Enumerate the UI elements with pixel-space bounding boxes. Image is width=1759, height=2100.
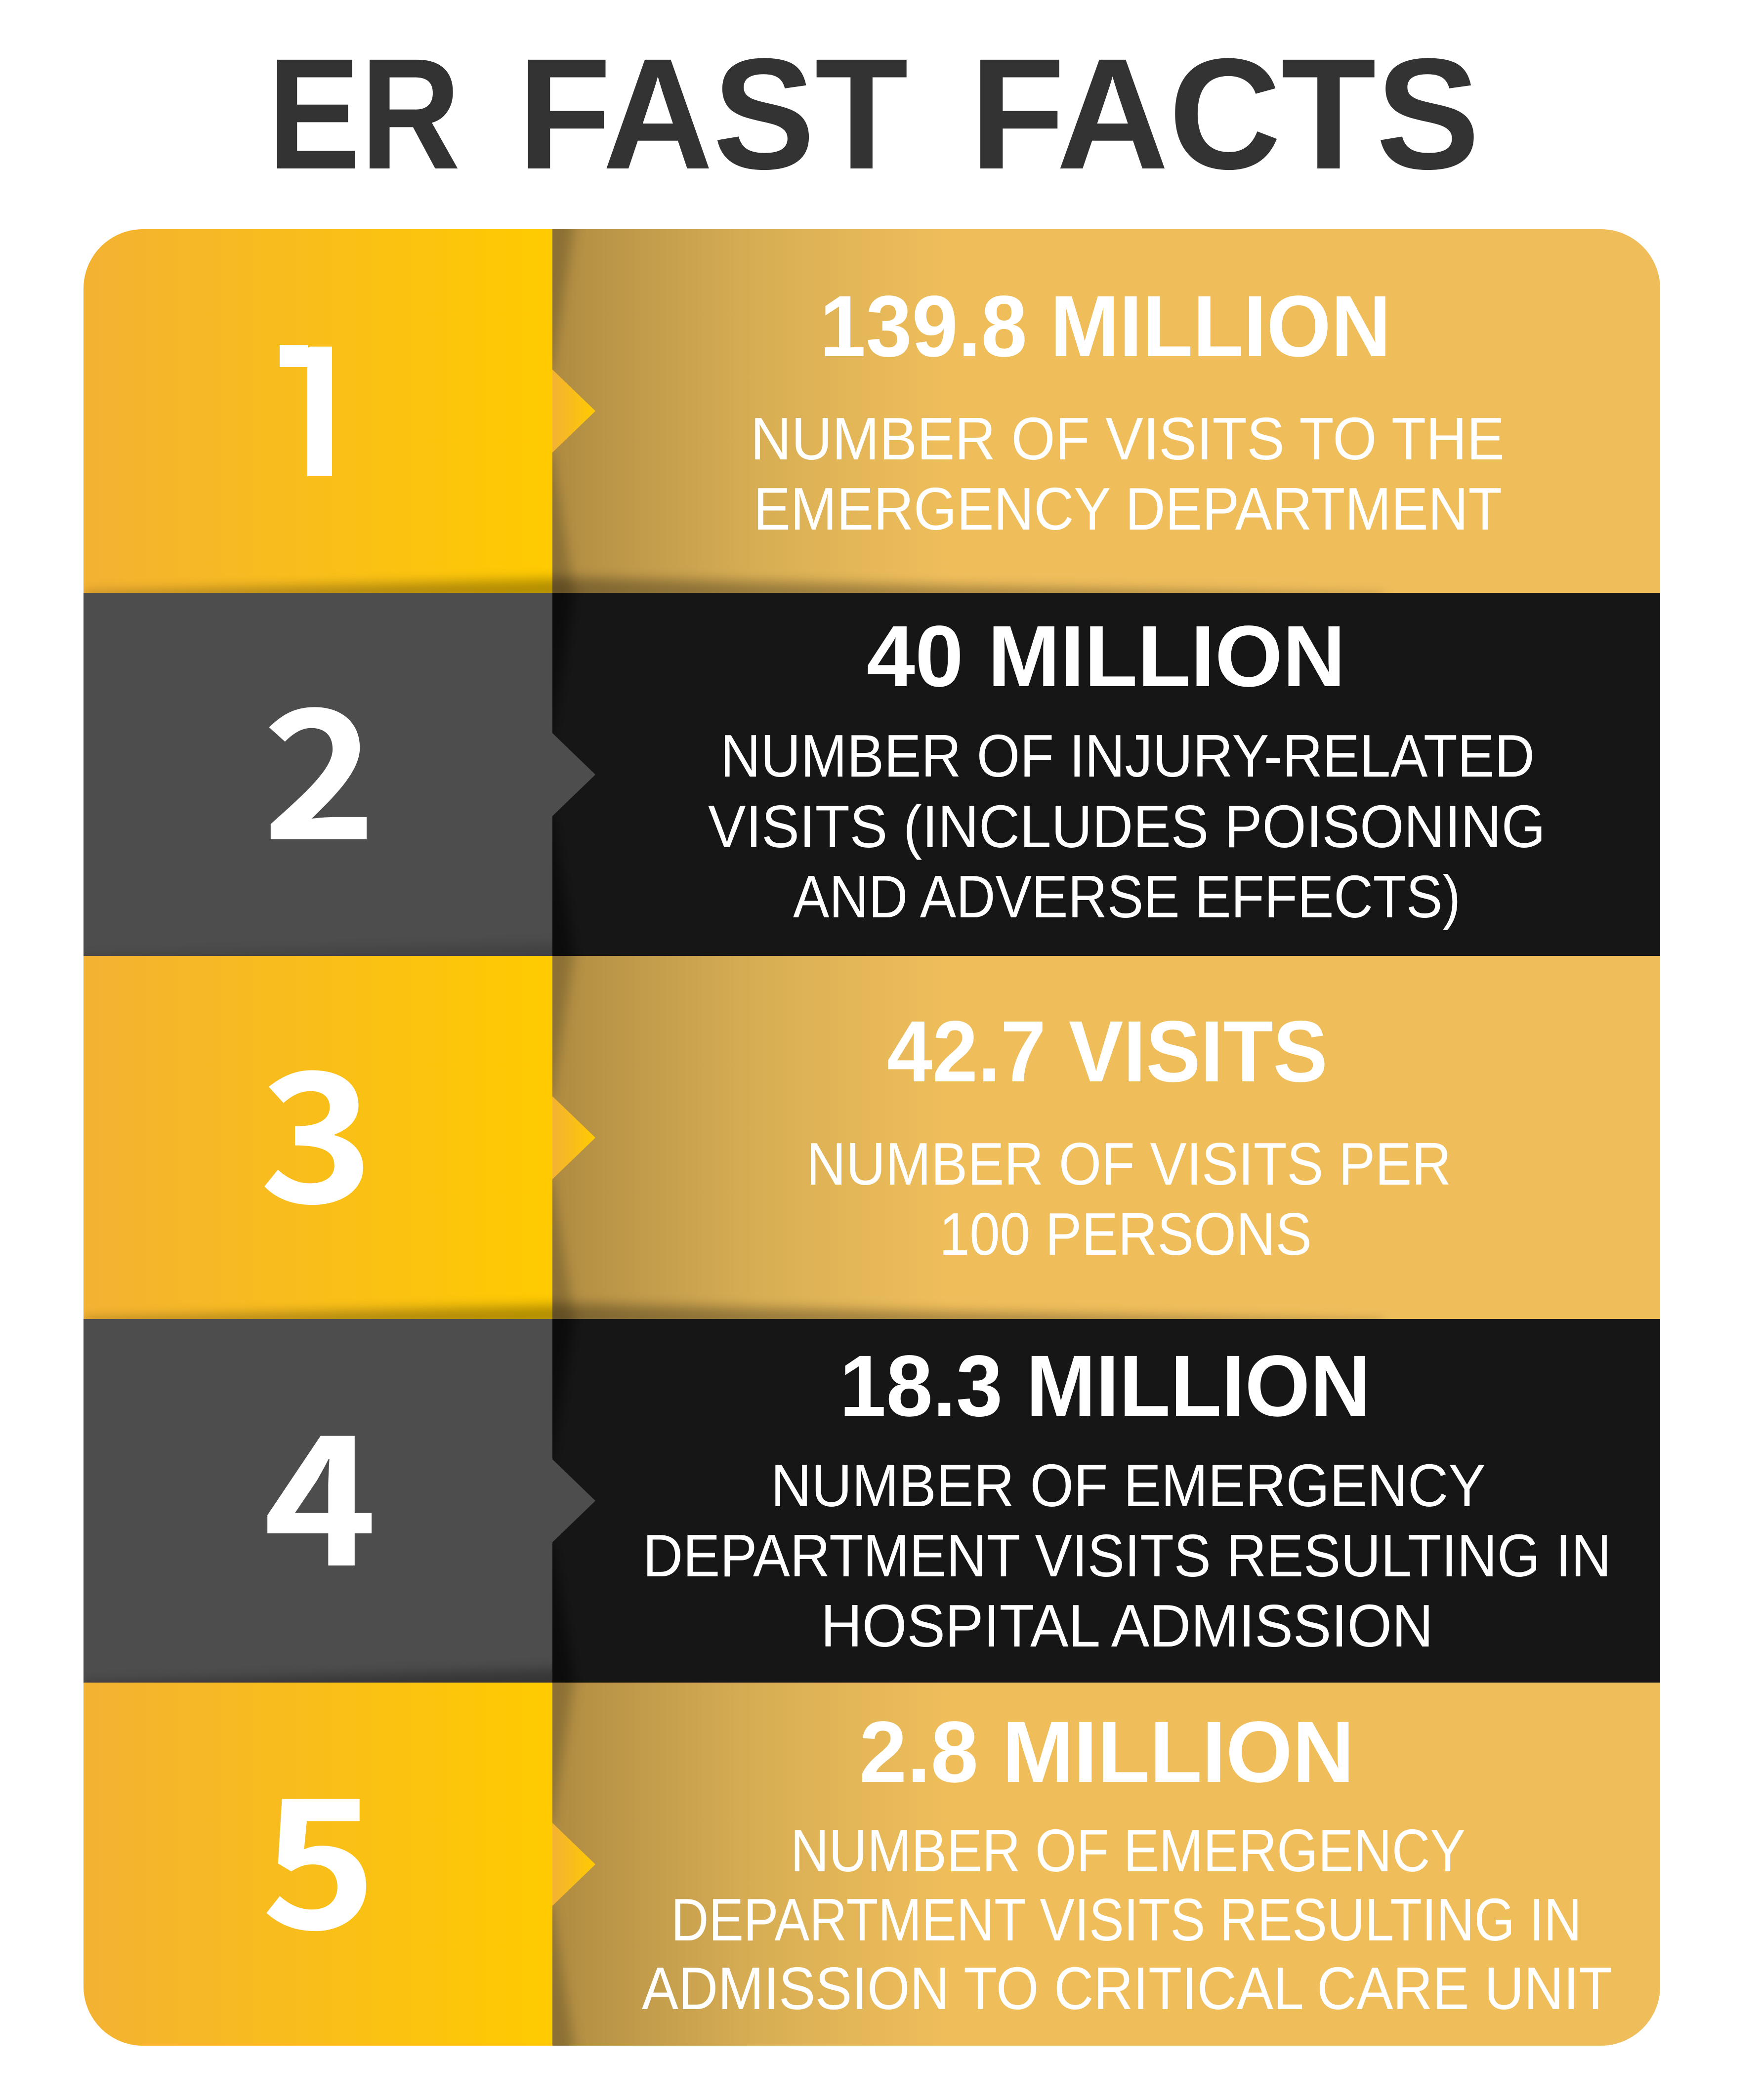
description 4 <box>643 1452 1611 1659</box>
panel: fact 1 <box>84 217 1660 603</box>
description 5: DEPARTMENT VISITS RESULTING IN <box>671 1886 1582 1953</box>
description 3: 100 PERSONS <box>939 1200 1312 1268</box>
description 2 <box>708 722 1546 930</box>
number 1: 1 <box>250 268 378 528</box>
title: FAST <box>518 25 908 202</box>
description 1: EMERGENCY DEPARTMENT <box>754 475 1502 542</box>
title: FACTS <box>970 25 1480 202</box>
description 2: AND ADVERSE EFFECTS) <box>793 863 1461 930</box>
panel: fast facts card <box>84 217 1660 2056</box>
stat: 139.8 million: 139.8 MILLION <box>820 278 1391 375</box>
description 5: NUMBER OF EMERGENCY <box>791 1817 1466 1884</box>
number 4: 4 <box>263 1357 377 1617</box>
panel: fact 5 <box>84 1671 1660 2056</box>
title <box>268 25 1480 202</box>
panel: fact 4 <box>84 1307 1660 1692</box>
icon: arrow 1 <box>552 370 595 453</box>
description 5: ADMISSION TO CRITICAL CARE UNIT <box>642 1955 1612 2022</box>
title: ER <box>268 25 461 202</box>
description 2: NUMBER OF INJURY-RELATED <box>720 722 1535 789</box>
description 5 <box>642 1817 1612 2022</box>
icon: arrow 2 <box>552 733 595 816</box>
description 2: VISITS (INCLUDES POISONING <box>708 793 1546 860</box>
panel: fact 3 <box>84 944 1660 1329</box>
icon: arrow 5 <box>552 1823 595 1906</box>
description 3: NUMBER OF VISITS PER <box>806 1130 1451 1197</box>
number 2: 2 <box>262 631 377 891</box>
number 5: 5 <box>261 1720 377 1980</box>
description 4: HOSPITAL ADMISSION <box>821 1592 1433 1659</box>
stat: 2.8 million: 2.8 MILLION <box>859 1704 1354 1801</box>
description 3 <box>806 1130 1451 1268</box>
stat: 18.3 million: 18.3 MILLION <box>839 1338 1371 1435</box>
description 4: DEPARTMENT VISITS RESULTING IN <box>643 1522 1611 1589</box>
stat: 42.7 visits: 42.7 VISITS <box>887 1003 1328 1100</box>
number 1 <box>280 345 332 476</box>
description 4: NUMBER OF EMERGENCY <box>771 1452 1486 1519</box>
description 1: NUMBER OF VISITS TO THE <box>751 405 1505 472</box>
stat: 40 million: 40 MILLION <box>867 608 1345 705</box>
description 1 <box>755 417 1502 530</box>
icon: arrow 3 <box>552 1096 595 1179</box>
icon: arrow 4 <box>552 1459 595 1542</box>
number 3: 3 <box>259 994 374 1254</box>
panel: fact 2 <box>84 581 1660 966</box>
